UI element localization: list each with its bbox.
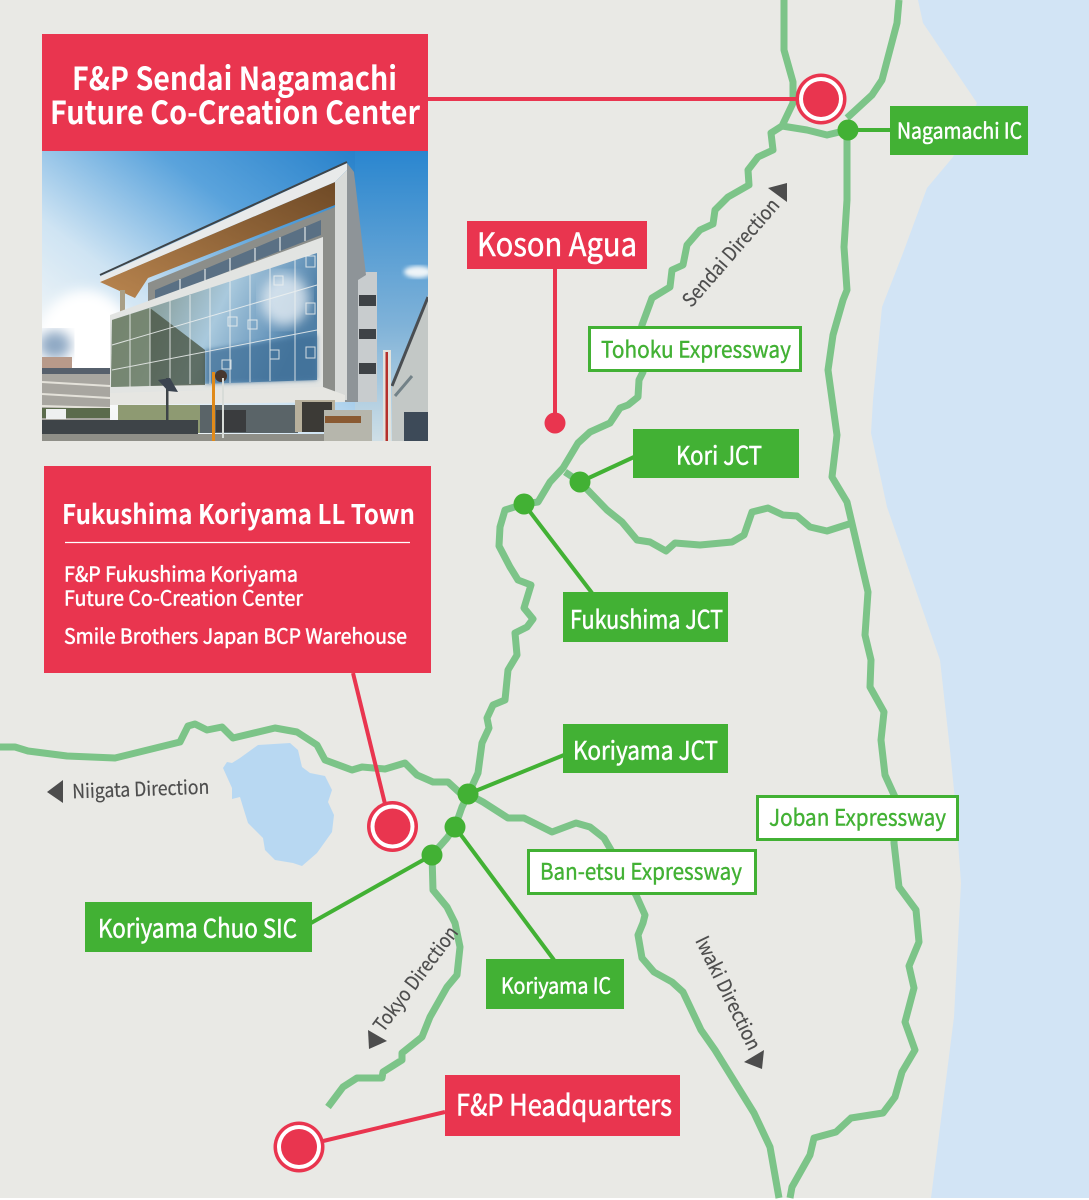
road: Ban-etsu Expressway west: [0, 724, 468, 795]
label: Fukushima JCT: [563, 592, 728, 642]
red pole: [383, 350, 391, 441]
leader: Nagamachi IC: [848, 128, 890, 132]
glass frame: [110, 237, 323, 397]
panel: Fukushima Koriyama LL Town: [44, 466, 431, 673]
road: north-east branch: [847, 0, 899, 118]
node: Nagamachi IC: [838, 120, 858, 140]
heading: F&P Sendai Nagamachi Future Co-Creation Center: F&P Sendai Nagamachi: [72, 54, 397, 100]
leader: Fukushima Koriyama LL Town: [353, 673, 386, 808]
label: Fukushima JCT: Fukushima JCT: [570, 600, 723, 636]
heading: F&P Sendai Nagamachi Future Co-Creation Center: Future Co-Creation Center: [50, 88, 420, 134]
label: Koriyama JCT: Koriyama JCT: [573, 732, 718, 768]
label: Nagamachi IC: [890, 106, 1028, 155]
panel: Fukushima Koriyama LL Town: Fukushima Koriyama LL Town: [62, 493, 415, 532]
leader: Koson Agua: [553, 269, 557, 423]
panel: Fukushima Koriyama LL Town: Smile Brothers Japan BCP Warehouse: [64, 620, 407, 650]
direction: Sendai: Sendai Direction: [674, 191, 785, 312]
node: Kori JCT: [570, 472, 590, 492]
marker: Sendai Nagamachi: [796, 74, 846, 124]
leader: Headquarters: [319, 1112, 445, 1142]
sea: [871, 0, 1089, 1198]
road: Ban-etsu Expressway east: [468, 794, 779, 1198]
road: Kori branch: [565, 472, 849, 551]
white column: [335, 170, 347, 400]
marker: Headquarters: [274, 1122, 324, 1172]
panel: Fukushima Koriyama LL Town: F&P Fukushima Koriyama: [64, 558, 298, 588]
node: Fukushima JCT: [514, 494, 534, 514]
upper glass strip: [155, 220, 321, 300]
label: Joban Expressway: [758, 796, 958, 840]
road: Nagamachi spur: [782, 126, 848, 135]
label: Tohoku Expressway: [590, 328, 800, 370]
fence and ground: [42, 420, 198, 434]
direction: Iwaki: Iwaki Direction: [689, 930, 770, 1054]
label: Koson Agua: Koson Agua: [477, 220, 637, 266]
label: Koriyama Chuo SIC: Koriyama Chuo SIC: [98, 908, 297, 946]
label: Koriyama IC: [486, 959, 624, 1009]
label: Ban-etsu Expressway: Ban-etsu Expressway: [540, 854, 742, 886]
leader: Koriyama Chuo SIC: [311, 855, 432, 923]
label: Tohoku Expressway: Tohoku Expressway: [601, 332, 791, 364]
direction: Niigata: Niigata Direction: [72, 771, 210, 804]
node: Koriyama JCT: [458, 784, 478, 804]
panel: Fukushima Koriyama LL Town: Future Co-Creation Center: [64, 582, 303, 612]
label: Koriyama IC: Koriyama IC: [501, 970, 611, 1000]
marker: Fukushima Koriyama: [367, 801, 418, 852]
node: Koriyama IC: [444, 816, 466, 838]
node: Koriyama Chuo SIC: [422, 844, 442, 866]
base band and ground floor: [110, 387, 345, 405]
label: Kori JCT: Kori JCT: [676, 436, 762, 472]
label: Koriyama Chuo SIC: [85, 902, 312, 952]
label: Nagamachi IC: Nagamachi IC: [897, 114, 1022, 146]
road: Tohoku Expressway: [328, 0, 793, 1107]
road: Joban Expressway: [790, 130, 919, 1198]
tower stair: [358, 272, 377, 402]
apartment block: [42, 372, 110, 422]
panel: Sendai photo: [35, 151, 432, 441]
leader: Fukushima JCT: [524, 504, 592, 593]
right warehouse: [392, 295, 428, 441]
label: F&P Headquarters: [445, 1075, 680, 1136]
label: Koriyama JCT: [563, 724, 728, 773]
direction: Tokyo: Tokyo Direction: [365, 919, 464, 1037]
solar pole, orange pole: [166, 378, 168, 420]
leader: Sendai: [428, 97, 800, 101]
label: Ban-etsu Expressway: [528, 850, 756, 894]
leader: Kori JCT: [580, 457, 634, 482]
leader: Koriyama IC: [455, 827, 554, 960]
label: Kori JCT: [633, 429, 799, 478]
label: F&P Headquarters: F&P Headquarters: [456, 1082, 672, 1124]
marker: Koson Agua: [544, 412, 566, 434]
label: Joban Expressway: Joban Expressway: [769, 800, 946, 832]
lake: [223, 743, 334, 866]
leader: Koriyama JCT: [468, 755, 564, 794]
roof fascia: [100, 163, 347, 282]
concrete wall and sign: [324, 410, 372, 441]
soffit and wall behind: [148, 207, 335, 400]
heading: F&P Sendai Nagamachi Future Co-Creation Center: [42, 34, 428, 151]
side wall: [345, 163, 366, 402]
